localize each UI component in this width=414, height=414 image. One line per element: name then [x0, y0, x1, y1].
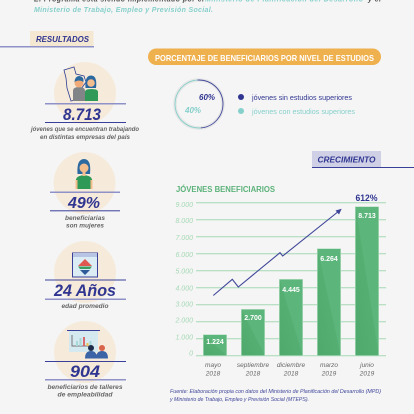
- icon: calendar: [54, 241, 116, 303]
- intro text: Ministerio de Trabajo, Empleo y Previsión Social.: [34, 7, 213, 14]
- growth arrow: [213, 209, 342, 296]
- x axis labels: junio: [359, 362, 374, 369]
- y axis and grid lines: 9.000: [175, 202, 193, 209]
- stat: 24 years average age: 24 Años: [53, 281, 116, 300]
- chart title: JÓVENES BENEFICIARIOS: [176, 185, 276, 194]
- y axis and grid lines: 2.000: [174, 318, 193, 324]
- stat: 8.713 young people: jóvenes que se encuentran trabajando: [30, 127, 139, 133]
- stat: 8.713 young people: 8.713: [63, 105, 101, 124]
- heading pill: percentage by education level: [148, 48, 381, 65]
- x axis labels: 2019: [359, 370, 375, 378]
- stat: 49% women: [50, 152, 120, 230]
- stat: 8.713 young people: [30, 62, 139, 141]
- x axis labels: diciembre: [277, 362, 305, 369]
- bar values: 2.700: [244, 315, 262, 322]
- y axis and grid lines: [174, 202, 386, 358]
- heading: resultados: RESULTADOS: [36, 35, 90, 44]
- stat: 24 years average age: [45, 241, 126, 310]
- heading: crecimiento: [312, 151, 414, 168]
- donut chart: education level: [173, 78, 225, 130]
- x axis labels: 2018: [245, 370, 261, 378]
- bar values: 4.445: [282, 287, 300, 294]
- stat: 904 workshop beneficiaries: de empleabilidad: [58, 392, 113, 398]
- x axis labels: [205, 362, 375, 378]
- legend: [238, 94, 356, 116]
- stat: 904 workshop beneficiaries: [45, 321, 126, 398]
- stat: 49% women: 49%: [67, 195, 100, 212]
- y axis and grid lines: 7.000: [175, 235, 193, 242]
- source note: Fuente: Elaboración propia con datos del Ministerio de Planificación del Desarrollo (MPD): [170, 389, 381, 395]
- donut chart: education level: 40%: [184, 106, 201, 115]
- x axis labels: mayo: [205, 362, 221, 369]
- x axis labels: 2018: [283, 370, 299, 378]
- stat: 904 workshop beneficiaries: beneficiarios de talleres: [48, 385, 123, 391]
- heading: crecimiento: CRECIMIENTO: [318, 156, 376, 164]
- source note: [169, 389, 381, 403]
- source note: y Ministerio de Trabajo, Empleo y Previsión Social (MTEPS).: [169, 397, 309, 403]
- stat: 49% women: beneficiarias: [65, 216, 106, 222]
- x axis labels: septiembre: [237, 362, 269, 369]
- stat: 904 workshop beneficiaries: 904: [70, 362, 101, 381]
- y axis and grid lines: 8.000: [175, 218, 193, 225]
- y axis and grid lines: 0: [189, 350, 193, 358]
- y axis and grid lines: 1.000: [175, 334, 193, 342]
- icon: presentation audience: [54, 321, 116, 383]
- y axis and grid lines: 3.000: [175, 302, 193, 308]
- bars: [203, 207, 379, 356]
- x axis labels: 2018: [205, 370, 221, 378]
- stat: 49% women: son mujeres: [66, 224, 105, 230]
- legend: jóvenes sin estudios superiores: [251, 95, 353, 102]
- bar values: 8.713: [358, 213, 376, 220]
- icon: woman: [54, 152, 116, 214]
- heading: resultados: [0, 31, 94, 48]
- y axis and grid lines: 6.000: [175, 252, 193, 259]
- bar chart: young beneficiaries: [174, 185, 386, 378]
- stat: 24 years average age: edad promedio: [62, 304, 109, 310]
- y axis and grid lines: 4.000: [175, 286, 193, 292]
- stat: 8.713 young people: en distintas empresas del país: [40, 135, 131, 141]
- heading pill: percentage by education level: PORCENTAJE DE BENEFICIARIOS POR NIVEL DE ESTUDIOS: [155, 54, 374, 63]
- icon: map and two young people: [54, 62, 116, 124]
- donut chart: education level: 60%: [199, 93, 215, 102]
- growth percentage: 612%: [356, 193, 378, 204]
- intro text: [34, 0, 382, 14]
- x axis labels: marzo: [320, 362, 338, 369]
- bar values: 6.264: [320, 256, 338, 263]
- x axis labels: 2019: [321, 370, 337, 378]
- y axis and grid lines: 5.000: [175, 268, 193, 276]
- bar values: 1.224: [206, 339, 224, 346]
- bar values: [206, 213, 376, 346]
- legend: jóvenes con estudios superiores: [251, 109, 356, 116]
